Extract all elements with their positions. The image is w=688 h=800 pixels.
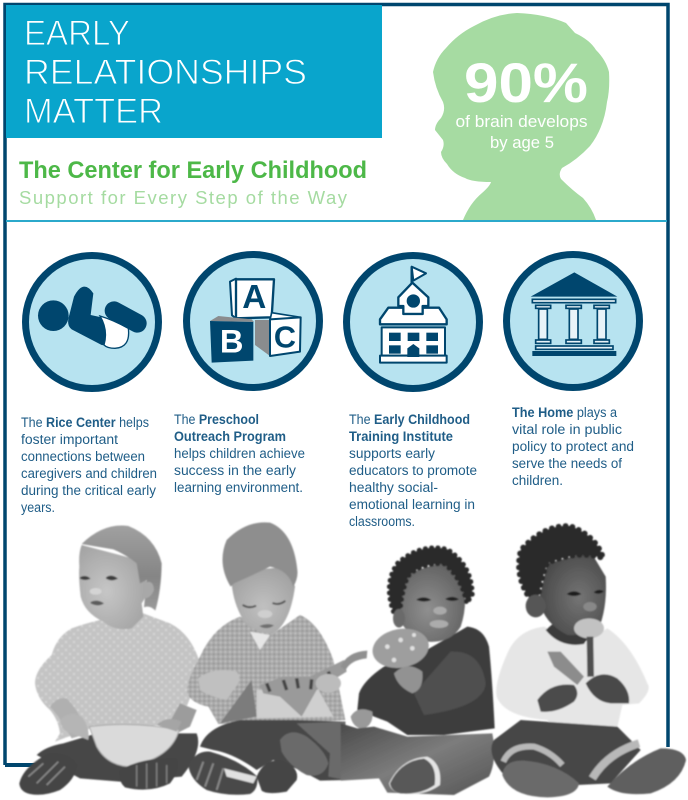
text block: The Home: The Home plays a (512, 405, 617, 420)
text block: Early Childhood Training Institute (349, 412, 477, 529)
icon: government building (506, 254, 640, 388)
text block: Rice Center: The Rice Center helps (21, 415, 149, 430)
callout: child head silhouette with 90% statistic: 90% (464, 51, 588, 114)
header divider (6, 220, 667, 222)
text block: Early Childhood Training Institute: Training Institute (349, 429, 453, 444)
title banner: EARLY (24, 14, 130, 53)
title banner: RELATIONSHIPS (24, 53, 307, 92)
callout: child head silhouette with 90% statistic: by age 5 (490, 134, 554, 152)
subheading: Support for Every Step of the Way (19, 187, 348, 208)
text block: The Home: vital role in public (512, 422, 622, 437)
icon: alphabet blocks (186, 254, 320, 388)
callout: child head silhouette with 90% statistic (433, 13, 609, 220)
text block: Rice Center (21, 415, 157, 515)
callout: child head silhouette with 90% statistic: of brain develops (456, 113, 588, 131)
text block: Preschool Outreach Program (174, 412, 305, 495)
heading: The Center for Early Childhood: The Center for Early Childhood (19, 157, 367, 184)
icon: alphabet blocks: C (274, 320, 296, 354)
text block: Early Childhood Training Institute: classrooms. (349, 514, 415, 529)
icon: baby (26, 256, 158, 388)
text block: Preschool Outreach Program: learning environment. (174, 480, 303, 495)
photo: four seated toddlers (19, 522, 686, 797)
text block: Preschool Outreach Program: helps children achieve (174, 446, 305, 461)
text block: The Home: policy to protect and (512, 439, 634, 454)
text block: Early Childhood Training Institute: The Early Childhood (349, 412, 470, 427)
text block: Rice Center: years. (21, 500, 55, 515)
text block: Early Childhood Training Institute: supports early (349, 446, 435, 461)
icon: alphabet blocks: A (242, 279, 266, 316)
text block: Rice Center: foster important (21, 432, 118, 447)
text block: Rice Center: connections between (21, 449, 145, 464)
toddler 2 with toy (187, 522, 347, 795)
toddler 1 with bowl (19, 526, 199, 795)
text block: Early Childhood Training Institute: healthy social- (349, 480, 438, 495)
icon: school building (346, 256, 480, 388)
text block: Rice Center: during the critical early (21, 483, 156, 498)
title banner: MATTER (24, 92, 163, 131)
toddler 4 with pacifier (491, 526, 686, 797)
text block: Preschool Outreach Program: Outreach Program (174, 429, 286, 444)
text block: Early Childhood Training Institute: educators to promote (349, 463, 477, 478)
text block: The Home: children. (512, 473, 563, 488)
text block: The Home: serve the needs of (512, 456, 622, 471)
text block: Preschool Outreach Program: The Preschool (174, 412, 259, 427)
title banner (6, 5, 382, 138)
text block: Preschool Outreach Program: success in the early (174, 463, 296, 478)
text block: Rice Center: caregivers and children (21, 466, 157, 481)
toddler 3 with disc (341, 548, 495, 795)
icon: alphabet blocks: B (220, 323, 243, 360)
text block: The Home (512, 405, 634, 488)
text block: Early Childhood Training Institute: emotional learning in (349, 497, 475, 512)
